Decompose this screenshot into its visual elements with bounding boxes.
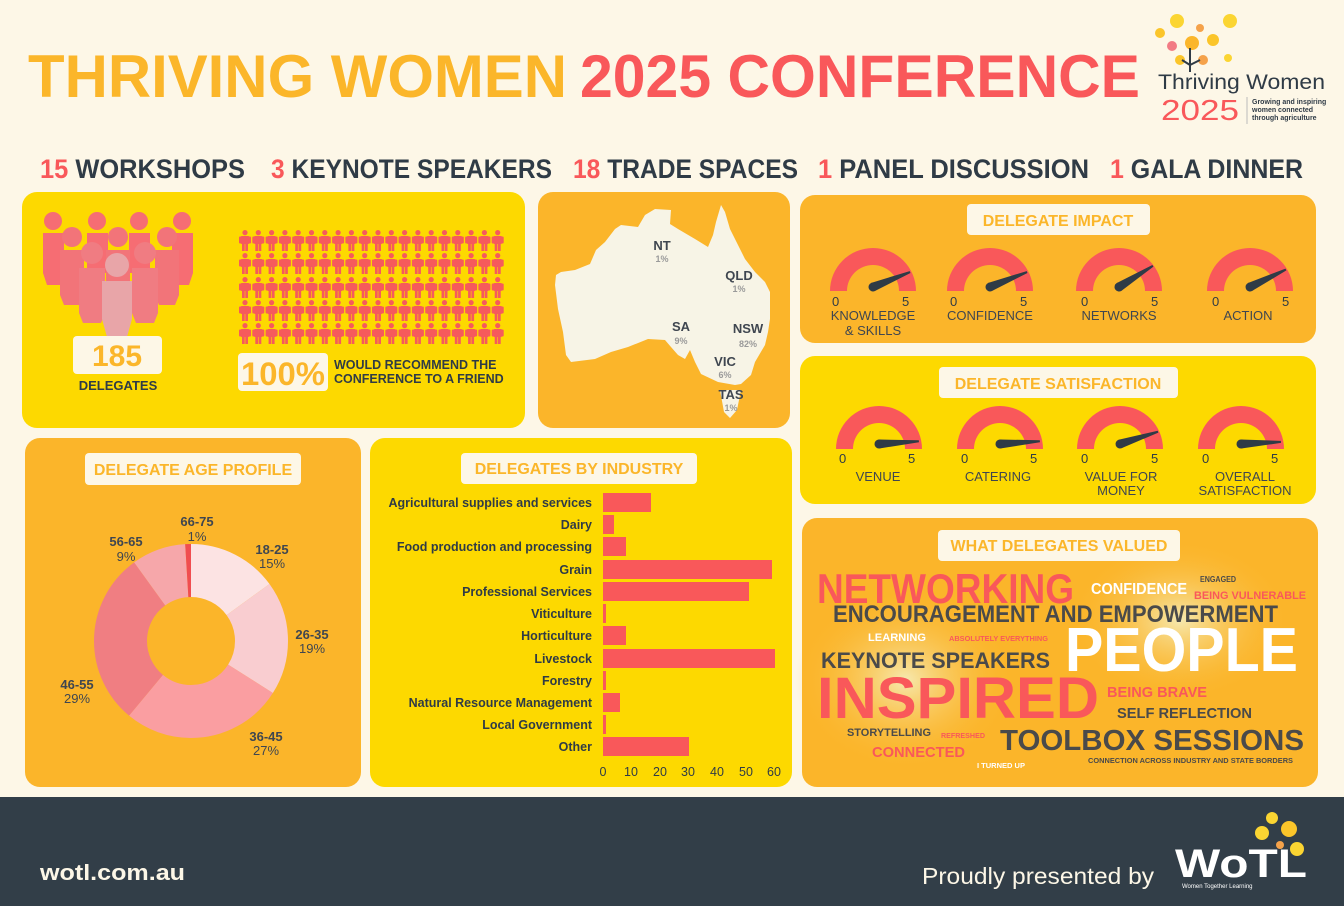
gauges: satisfaction: 5 [908,451,915,466]
gauges: impact: 0 [832,294,839,309]
stats row: 1 PANEL DISCUSSION [818,154,1089,184]
stats row [40,154,1303,184]
heading: delegate impact [967,204,1150,235]
donut labels: 56-65 [109,534,143,549]
bar chart: industry: Local Government [482,718,593,732]
donut chart [120,570,262,712]
footer presented by: Proudly presented by [922,863,1155,889]
logo: WoTL: Women Together Learning [1182,884,1252,890]
gauges: satisfaction [836,406,1291,498]
word cloud: BEING VULNERABLE [1194,590,1306,602]
gauges: impact: 0 [1081,294,1088,309]
heading: what delegates valued: WHAT DELEGATES VALUED [951,538,1167,555]
donut labels [60,514,329,758]
map labels [653,238,764,413]
map labels: 9% [674,336,688,346]
word cloud: BEING BRAVE [1107,684,1207,701]
footer [0,797,1344,906]
donut labels: 46-55 [60,677,94,692]
word cloud: SELF REFLECTION [1117,705,1252,722]
panel: word cloud [795,518,1318,787]
100% recommend: WOULD RECOMMEND THE [334,358,496,372]
word cloud: ENCOURAGEMENT AND EMPOWERMENT [833,601,1278,628]
stats row: 1 GALA DINNER [1110,154,1303,184]
donut labels: 1% [188,529,207,544]
stats row: 18 TRADE SPACES [573,154,798,184]
bar chart: industry: Natural Resource Management [409,696,593,710]
gauges: impact: 5 [1282,294,1289,309]
bar chart: industry: 40 [710,765,724,779]
logo: WoTL: WoTL [1175,842,1307,886]
gauges: satisfaction: 0 [961,451,968,466]
gauges: impact: NETWORKS [1081,308,1157,323]
gauges: satisfaction: 5 [1151,451,1158,466]
gauges: satisfaction: 0 [839,451,846,466]
bar chart: industry: Dairy [561,518,592,532]
map: Australia [555,205,770,418]
donut labels: 66-75 [180,514,214,529]
map labels: VIC [714,354,736,369]
stats row: 15 WORKSHOPS [40,154,245,184]
donut labels: 36-45 [249,729,283,744]
gauges: impact: 0 [950,294,957,309]
bar chart: industry: Professional Services [462,585,592,599]
logo: Thriving Women 2025: Growing and inspiring [1252,99,1326,106]
gauges: impact: KNOWLEDGE [831,308,916,323]
bar chart: industry: Forestry [542,674,592,688]
gauges: satisfaction: MONEY [1097,483,1145,498]
map labels: SA [672,319,691,334]
gauges: impact: 5 [1151,294,1158,309]
donut labels: 19% [299,641,325,656]
map labels: 1% [655,254,669,264]
gauges: impact: 5 [902,294,909,309]
bar chart: industry: Other [559,740,592,754]
gauges: satisfaction: 0 [1081,451,1088,466]
title: THRIVING WOMEN [28,43,567,110]
panel: delegates [22,192,525,428]
gauges: satisfaction: CATERING [965,469,1031,484]
heading: delegate satisfaction: DELEGATE SATISFACTION [955,376,1161,393]
bar chart: industry: Grain [559,563,592,577]
word cloud: INSPIRED [817,666,1099,731]
donut labels: 26-35 [295,627,329,642]
word cloud: CONFIDENCE [1091,581,1187,598]
bar chart: industry: 30 [681,765,695,779]
gauges: impact: 5 [1020,294,1027,309]
bar chart: industry: 0 [600,765,607,779]
heading: industry: DELEGATES BY INDUSTRY [475,461,684,478]
word cloud: CONNECTION ACROSS INDUSTRY AND STATE BORDERS [1088,758,1293,765]
logo: Thriving Women 2025: through agriculture [1252,115,1317,122]
gauges: satisfaction: VENUE [856,469,901,484]
heading: what delegates valued [938,530,1180,561]
gauges: impact [830,248,1293,338]
185 delegates [73,336,162,393]
panel: delegate impact [800,195,1316,343]
word cloud [817,565,1306,770]
panel: delegate satisfaction [800,356,1316,504]
word cloud: KEYNOTE SPEAKERS [821,648,1050,673]
word cloud: I TURNED UP [977,763,1025,770]
word cloud: ABSOLUTELY EVERYTHING [949,634,1048,643]
map labels: 1% [724,403,738,413]
100% recommend: CONFERENCE TO A FRIEND [334,372,504,386]
100% recommend [238,353,504,392]
logo: Thriving Women 2025 [1155,14,1326,127]
bar chart: industry: 60 [767,765,781,779]
map labels: NT [653,238,671,253]
gauges: satisfaction: VALUE FOR [1085,469,1157,484]
gauges: satisfaction: SATISFACTION [1199,483,1291,498]
donut labels: 27% [253,743,279,758]
bar chart: industry: Agricultural supplies and services [388,496,592,510]
word cloud: NETWORKING [817,565,1074,612]
logo: Thriving Women 2025: Thriving Women [1158,71,1325,94]
word cloud: PEOPLE [1065,616,1298,685]
word cloud: CONNECTED [872,744,965,761]
heading: age profile [85,453,301,485]
title [28,43,1140,110]
donut labels: 15% [259,556,285,571]
bar chart: industry: Viticulture [531,607,592,621]
word cloud: LEARNING [868,632,926,644]
bar chart: industry: Livestock [534,652,592,666]
word cloud: REFRESHED [941,731,986,740]
gauges: impact: & SKILLS [845,323,902,338]
word cloud: STORYTELLING [847,727,931,739]
gauges: satisfaction: 5 [1271,451,1278,466]
bar chart: industry: Food production and processing [397,540,592,554]
heading: delegate impact: DELEGATE IMPACT [983,213,1133,230]
logo: Thriving Women 2025: 2025 [1161,95,1239,127]
gauges: impact: 0 [1212,294,1219,309]
100% recommend: 100% [241,356,325,392]
map labels: QLD [725,268,753,283]
185 delegates: 185 [92,340,142,373]
donut labels: 18-25 [255,542,289,557]
logo: Thriving Women 2025: women connected [1251,107,1313,114]
bar chart: industry [388,493,781,779]
map labels: 1% [732,284,746,294]
donut labels: 29% [64,691,90,706]
gauges: impact: CONFIDENCE [947,308,1033,323]
map labels: NSW [733,321,764,336]
logo: WoTL [1175,812,1307,890]
map labels: 82% [739,339,757,349]
heading: industry [461,453,697,484]
bar chart: industry: Horticulture [521,629,592,643]
title: 2025 CONFERENCE [580,43,1140,110]
map labels: 6% [718,370,732,380]
heading: age profile: DELEGATE AGE PROFILE [94,462,292,479]
icon: crowd [43,212,193,337]
donut labels: 9% [117,549,136,564]
gauges: satisfaction: 0 [1202,451,1209,466]
bar chart: industry: 10 [624,765,638,779]
word cloud: ENGAGED [1200,575,1236,584]
185 delegates: DELEGATES [79,378,158,393]
gauges: impact: ACTION [1223,308,1273,323]
gauges: satisfaction: OVERALL [1215,469,1275,484]
stats row: 3 KEYNOTE SPEAKERS [271,154,552,184]
icon grid: 100 people [239,230,504,344]
panel: age profile [25,438,361,787]
footer url: wotl.com.au [39,860,185,885]
map labels: TAS [718,387,744,402]
bar chart: industry: 20 [653,765,667,779]
panel: map [538,192,790,428]
heading: delegate satisfaction [939,367,1178,398]
panel: industry [370,438,792,787]
word cloud: TOOLBOX SESSIONS [1000,725,1304,757]
bar chart: industry: 50 [739,765,753,779]
gauges: satisfaction: 5 [1030,451,1037,466]
